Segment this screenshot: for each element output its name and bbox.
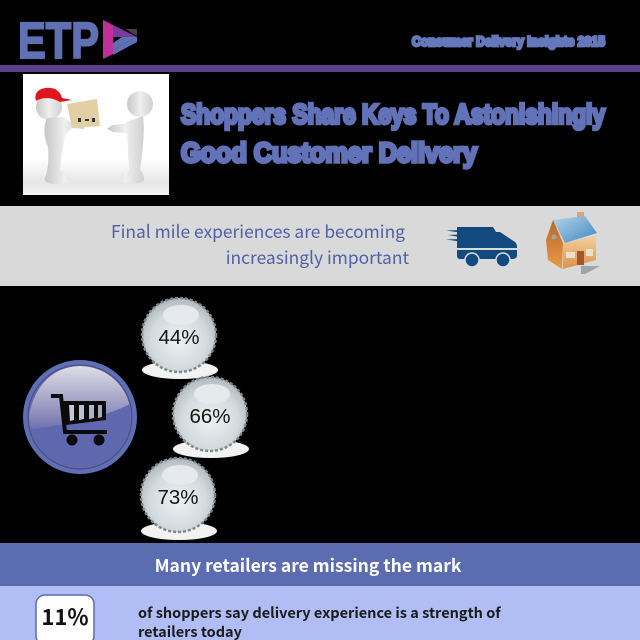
stat sphere: 44% [142, 298, 218, 379]
stat badge: 11% [41, 600, 89, 632]
logo: ETP: ETP [18, 12, 99, 69]
shopping cart button [23, 360, 137, 474]
courier cap [35, 88, 72, 102]
band text: Final mile experiences are becoming [111, 219, 405, 244]
stat sphere: 44%: 44% [158, 326, 200, 349]
title [181, 98, 605, 168]
band: final mile [0, 206, 640, 286]
icon: house [546, 212, 600, 274]
stat text [138, 602, 501, 640]
divider [0, 65, 640, 72]
stat sphere: 66%: 66% [189, 405, 231, 428]
section heading band [0, 543, 640, 586]
header tagline: Consumer Delivery Insights 2015 [412, 34, 605, 49]
stat text: of shoppers say delivery experience is a strength of [138, 602, 501, 623]
band text [111, 219, 409, 270]
icon: cart [51, 396, 107, 446]
stat badge [36, 595, 94, 640]
section heading band: Many retailers are missing the mark [155, 553, 462, 578]
parcel [67, 99, 100, 128]
stat sphere: 73% [141, 458, 217, 540]
figure: customer [107, 91, 153, 183]
icon: delivery truck [446, 227, 517, 267]
stat sphere: 73%: 73% [157, 486, 199, 509]
band text: increasingly important [226, 245, 409, 270]
photo: delivery man handing box to customer [23, 74, 169, 195]
figure: courier [36, 94, 84, 184]
stat sphere: 66% [173, 377, 249, 458]
title: Good Customer Delivery [181, 137, 477, 168]
stat row: 11% [0, 586, 640, 640]
